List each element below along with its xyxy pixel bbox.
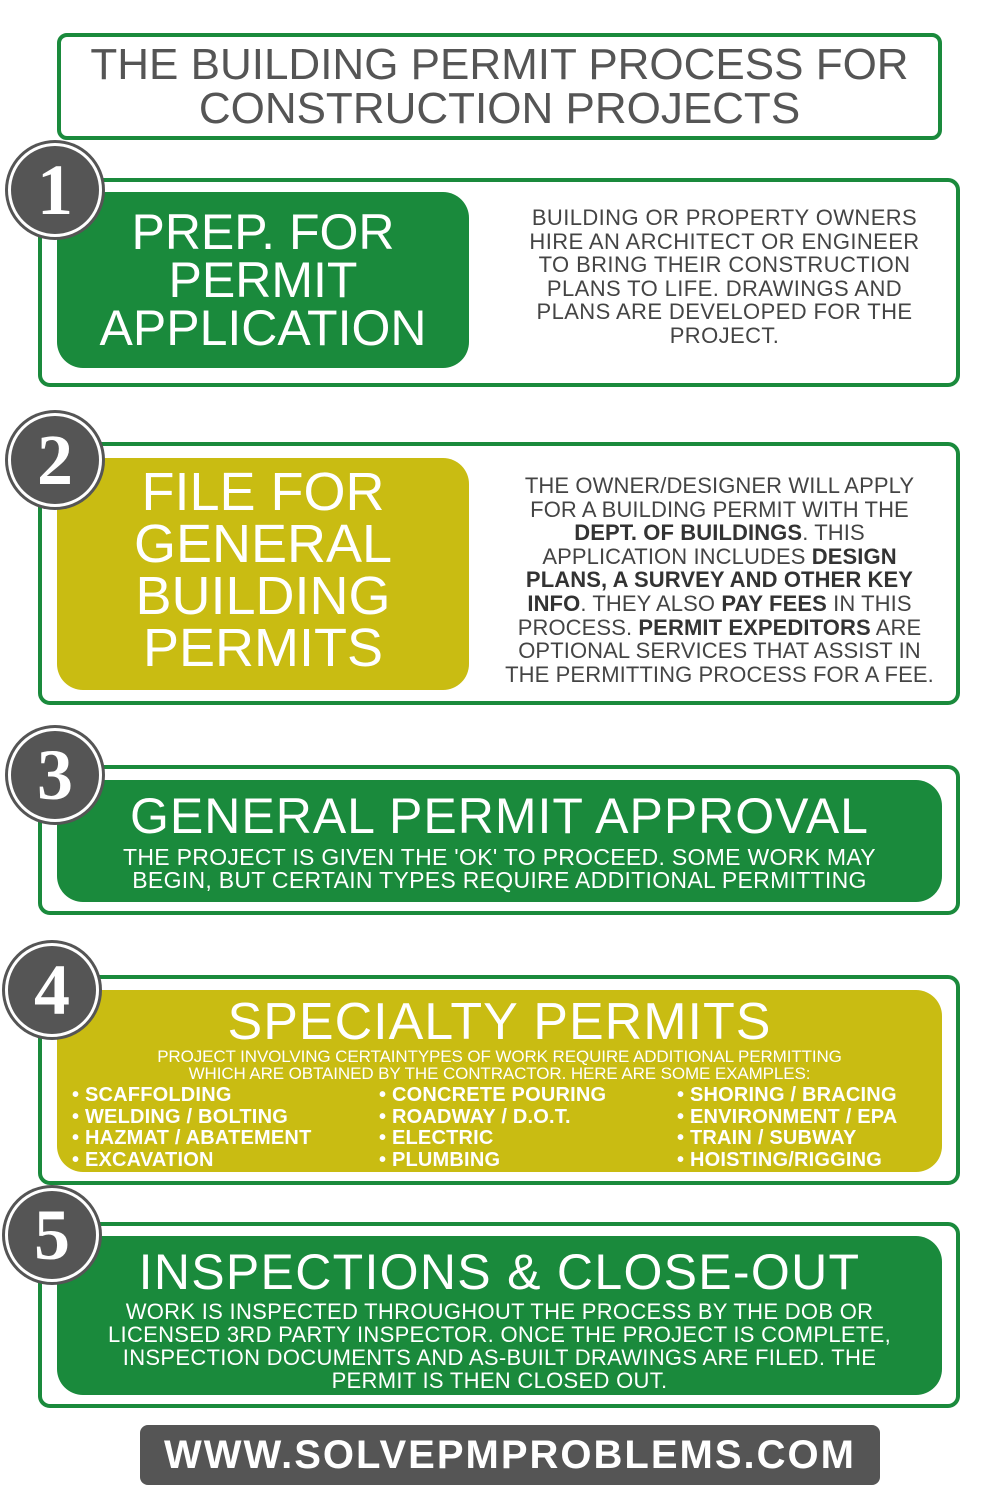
- list column 1: • EXCAVATION: [72, 1148, 214, 1170]
- list column 1: • HAZMAT / ABATEMENT: [72, 1127, 312, 1149]
- panel: step 4: [38, 975, 960, 1185]
- text: step 2 description: [505, 473, 934, 687]
- heading: prep for permit application: PERMIT: [169, 252, 357, 308]
- badge 5: [5, 1188, 99, 1282]
- panel: step 2: [38, 442, 960, 705]
- text: step 5 description: INSPECTION DOCUMENTS AND AS-BUILT DRAWINGS ARE FILED. THE: [123, 1345, 876, 1370]
- badge 2: 2: [37, 420, 73, 500]
- badge 3: [8, 728, 102, 822]
- list column 1: • SCAFFOLDING: [72, 1084, 232, 1106]
- list column 2: • CONCRETE POURING: [379, 1084, 606, 1106]
- text: step 5 description: WORK IS INSPECTED THROUGHOUT THE PROCESS BY THE DOB OR: [126, 1299, 873, 1324]
- text: step 2 description: DEPT. OF BUILDINGS. THIS: [574, 520, 865, 545]
- text: step 4 intro: WHICH ARE OBTAINED BY THE CONTRACTOR. HERE ARE SOME EXAMPLES:: [189, 1064, 810, 1083]
- list column 2: • ROADWAY / D.O.T.: [379, 1106, 571, 1128]
- footer: website: WWW.SOLVEPMPROBLEMS.COM: [164, 1433, 856, 1477]
- text: step 2 description: PROCESS. PERMIT EXPEDITORS ARE: [518, 615, 921, 640]
- badge 4: 4: [34, 950, 70, 1030]
- list column 3: • TRAIN / SUBWAY: [677, 1127, 856, 1149]
- box: inspections & close-out: [57, 1236, 942, 1395]
- heading: file for general building permits: [57, 458, 469, 690]
- box: specialty permits: [57, 990, 942, 1172]
- title: [57, 33, 942, 140]
- list column 3: • SHORING / BRACING: [677, 1084, 897, 1106]
- list column 1: [72, 1084, 312, 1170]
- text: step 2 description: THE PERMITTING PROCESS FOR A FEE.: [505, 662, 934, 687]
- heading: prep for permit application: PREP. FOR: [131, 204, 395, 260]
- badge 2: [8, 413, 102, 507]
- heading: inspections & close-out: INSPECTIONS & CLOSE-OUT: [139, 1244, 860, 1300]
- list column 1: • WELDING / BOLTING: [72, 1106, 288, 1128]
- text: step 1 description: PROJECT.: [670, 323, 779, 348]
- text: step 3 description: THE PROJECT IS GIVEN THE 'OK' TO PROCEED. SOME WORK MAY: [123, 844, 876, 870]
- badge 1: 1: [37, 150, 73, 230]
- text: step 1 description: BUILDING OR PROPERTY OWNERS: [532, 205, 917, 230]
- text: step 2 description: THE OWNER/DESIGNER WILL APPLY: [525, 473, 914, 498]
- text: step 1 description: [529, 205, 920, 348]
- heading: prep for permit application: [57, 192, 469, 368]
- heading: file for general building permits: FILE FOR: [141, 462, 385, 522]
- text: step 1 description: PLANS TO LIFE. DRAWINGS AND: [547, 276, 902, 301]
- footer: website: [140, 1425, 880, 1485]
- title: CONSTRUCTION PROJECTS: [199, 84, 800, 133]
- panel: step 5: [38, 1222, 960, 1408]
- heading: general permit approval: GENERAL PERMIT APPROVAL: [130, 788, 869, 844]
- heading: file for general building permits: BUILDING: [135, 566, 391, 626]
- list column 2: • PLUMBING: [379, 1148, 500, 1170]
- text: step 1 description: HIRE AN ARCHITECT OR ENGINEER: [529, 229, 920, 254]
- text: step 2 description: APPLICATION INCLUDES DESIGN: [542, 544, 897, 569]
- text: step 5 description: PERMIT IS THEN CLOSED OUT.: [332, 1368, 667, 1393]
- heading: specialty permits: SPECIALTY PERMITS: [228, 993, 771, 1051]
- badge 3: 3: [37, 735, 73, 815]
- text: step 2 description: OPTIONAL SERVICES THAT ASSIST IN: [518, 638, 921, 663]
- title: THE BUILDING PERMIT PROCESS FOR: [90, 40, 909, 89]
- badge 1: [8, 143, 102, 237]
- text: step 1 description: TO BRING THEIR CONSTRUCTION: [539, 252, 910, 277]
- text: step 5 description: [108, 1299, 891, 1393]
- badge 5: 5: [34, 1195, 70, 1275]
- text: step 5 description: LICENSED 3RD PARTY INSPECTOR. ONCE THE PROJECT IS COMPLETE,: [108, 1322, 891, 1347]
- text: step 2 description: FOR A BUILDING PERMIT WITH THE: [530, 497, 909, 522]
- panel: step 1: [38, 178, 960, 387]
- text: step 3 description: BEGIN, BUT CERTAIN TYPES REQUIRE ADDITIONAL PERMITTING: [132, 867, 867, 893]
- text: step 3 description: [123, 844, 876, 893]
- list column 3: • ENVIRONMENT / EPA: [677, 1106, 897, 1128]
- text: step 1 description: PLANS ARE DEVELOPED FOR THE: [537, 299, 912, 324]
- badge 4: [5, 943, 99, 1037]
- text: step 2 description: INFO. THEY ALSO PAY FEES IN THIS: [527, 591, 912, 616]
- heading: file for general building permits: PERMITS: [143, 618, 383, 678]
- text: step 4 intro: PROJECT INVOLVING CERTAINTYPES OF WORK REQUIRE ADDITIONAL PERMITTING: [157, 1047, 842, 1066]
- list column 2: • ELECTRIC: [379, 1127, 494, 1149]
- heading: prep for permit application: APPLICATION: [100, 300, 426, 356]
- heading: file for general building permits: GENERAL: [134, 514, 392, 574]
- text: step 2 description: PLANS, A SURVEY AND OTHER KEY: [526, 567, 913, 592]
- text: step 4 intro: [157, 1047, 842, 1083]
- list column 3: • HOISTING/RIGGING: [677, 1148, 882, 1170]
- list column 3: [677, 1084, 897, 1170]
- list column 2: [379, 1084, 606, 1170]
- panel: step 3: [38, 765, 960, 915]
- box: general permit approval: [57, 780, 942, 902]
